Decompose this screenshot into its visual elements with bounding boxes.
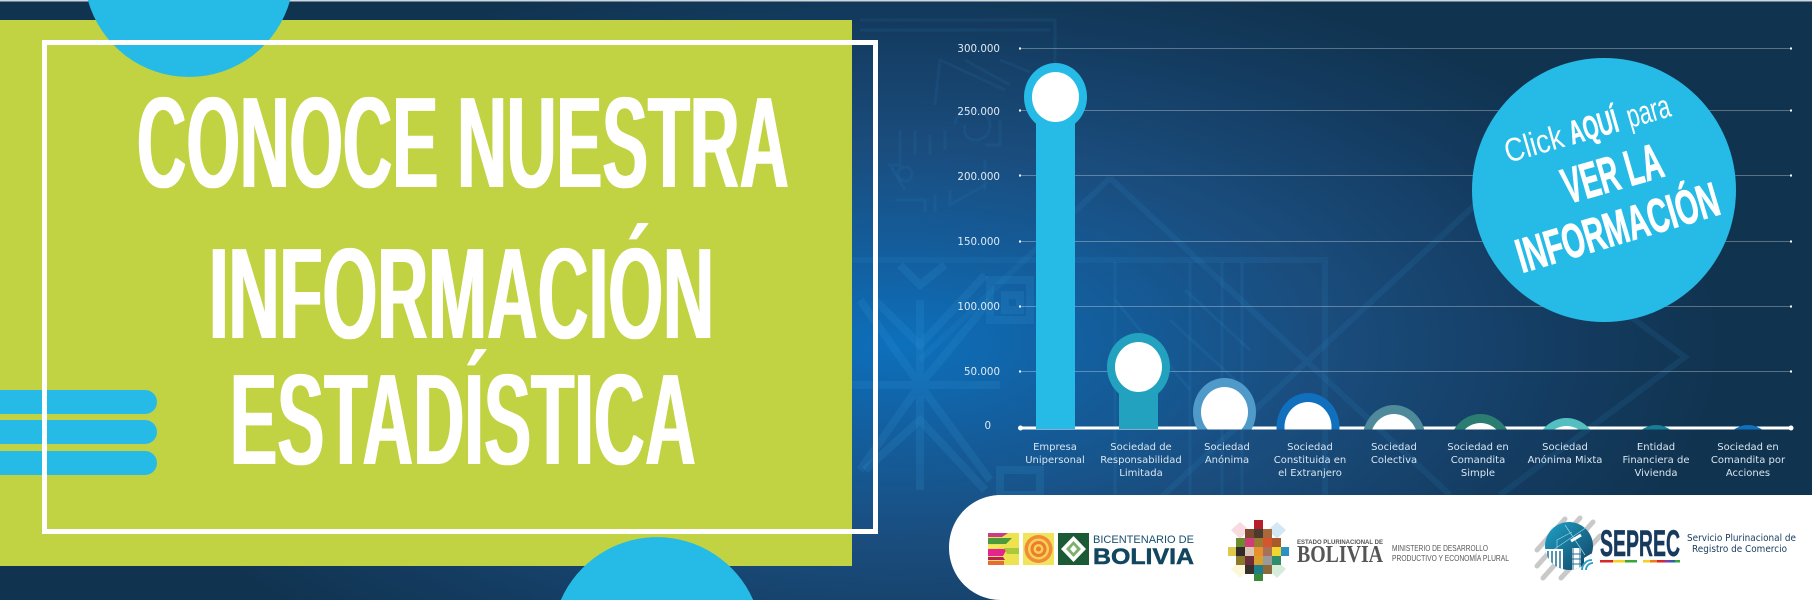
y axis labels (957, 43, 1000, 432)
category labels: Sociedad en (1447, 442, 1509, 453)
flag line (1600, 560, 1680, 562)
logo: Bicentenario de Bolivia: BICENTENARIO DE (1093, 534, 1194, 546)
decorative bottom circle (561, 537, 753, 600)
category labels: Unipersonal (1025, 455, 1085, 466)
decorative top circle (88, 0, 290, 77)
category labels: Acciones (1726, 468, 1770, 479)
icon: stripes square (988, 533, 1019, 565)
logo: SEPREC: Registro de Comercio (1692, 544, 1787, 555)
category labels (1025, 442, 1786, 479)
category labels: Sociedad (1287, 442, 1333, 453)
callout: click aquí: para (1622, 87, 1675, 135)
y axis labels: 0 (984, 420, 991, 432)
logo: Estado Plurinacional de Bolivia: ESTADO PLURINACIONAL DE (1297, 539, 1384, 546)
panel: green title block (0, 20, 852, 566)
category labels: el Extranjero (1278, 468, 1342, 479)
category labels: Anónima Mixta (1528, 454, 1602, 466)
grid lines (1019, 48, 1792, 372)
category labels: Sociedad (1204, 442, 1250, 453)
title (137, 69, 789, 493)
category labels: Anónima (1205, 454, 1249, 466)
callout: click aquí: Click (1500, 118, 1568, 170)
white frame (44, 42, 876, 532)
text: ministerio: PRODUCTIVO Y ECONOMÍA PLURAL (1392, 554, 1509, 563)
category labels: Entidad (1637, 442, 1675, 453)
logo: Estado Plurinacional de Bolivia (1228, 520, 1384, 581)
y axis labels: 100.000 (957, 301, 1000, 313)
bar: Sociedad Anónima (1193, 378, 1256, 430)
text: ministerio: MINISTERIO DE DESARROLLO (1392, 544, 1488, 553)
category labels: Comandita por (1711, 455, 1786, 466)
title: CONOCE NUESTRA (137, 69, 789, 216)
category labels: Responsabilidad (1100, 455, 1182, 466)
bar: Sociedad de Responsabilidad Limitada (1107, 333, 1170, 429)
category labels: Constituida en (1274, 455, 1346, 466)
callout: click aquí (1472, 58, 1736, 322)
chart: sociedades por tipo (957, 43, 1794, 493)
callout: click aquí: AQUÍ (1564, 102, 1623, 151)
bar: Sociedad en Comandita Simple (1454, 414, 1507, 430)
logo: Bicentenario de Bolivia (988, 533, 1194, 569)
category labels: Sociedad en (1717, 442, 1779, 453)
category labels: Sociedad (1371, 442, 1417, 453)
decorative stripes (0, 390, 157, 475)
logo: SEPREC: SEPREC (1600, 523, 1680, 564)
category labels: Vivienda (1634, 468, 1678, 479)
baseline (1018, 426, 1794, 430)
background pattern (850, 20, 1685, 545)
y axis labels: 300.000 (957, 43, 1000, 55)
title: INFORMACIÓN (209, 220, 714, 367)
category labels: Sociedad (1542, 442, 1588, 453)
logo: Bicentenario de Bolivia: BOLIVIA (1093, 544, 1194, 569)
y axis labels: 200.000 (957, 171, 1000, 183)
panel: logos (949, 495, 1812, 600)
icon: chakana (1228, 520, 1289, 581)
category labels: Colectiva (1371, 455, 1417, 466)
bar: Empresa Unipersonal (1024, 63, 1087, 429)
icon: woven diamond square (1058, 533, 1089, 565)
callout: click aquí: VER LA (1556, 133, 1669, 215)
title: ESTADÍSTICA (230, 346, 696, 493)
bar: Sociedad Colectiva (1364, 405, 1424, 430)
category labels: Sociedad de (1110, 442, 1172, 453)
text: ministerio (1392, 544, 1509, 563)
y axis labels: 150.000 (957, 236, 1000, 248)
category labels: Limitada (1119, 468, 1163, 479)
logo: SEPREC: Servicio Plurinacional de (1687, 533, 1796, 544)
logo: SEPREC (1537, 518, 1796, 578)
category labels: Financiera de (1623, 455, 1689, 466)
y axis labels: 50.000 (964, 366, 1000, 378)
icon: globe with diagonal stripes (1537, 518, 1600, 578)
bar: Sociedad Anónima Mixta (1543, 418, 1590, 430)
bar: Entidad Financiera de Vivienda (1642, 425, 1670, 430)
bars (1024, 63, 1762, 430)
category labels: Comandita (1451, 455, 1505, 466)
bar: Sociedad Constituida en el Extranjero (1276, 393, 1340, 430)
logo: Estado Plurinacional de Bolivia: BOLIVIA (1297, 542, 1384, 568)
y axis labels: 250.000 (957, 106, 1000, 118)
icon: spiral square (1023, 533, 1054, 565)
category labels: Empresa (1033, 442, 1077, 453)
category labels: Simple (1461, 468, 1495, 479)
bar: Sociedad en Comandita por Acciones (1734, 425, 1762, 430)
